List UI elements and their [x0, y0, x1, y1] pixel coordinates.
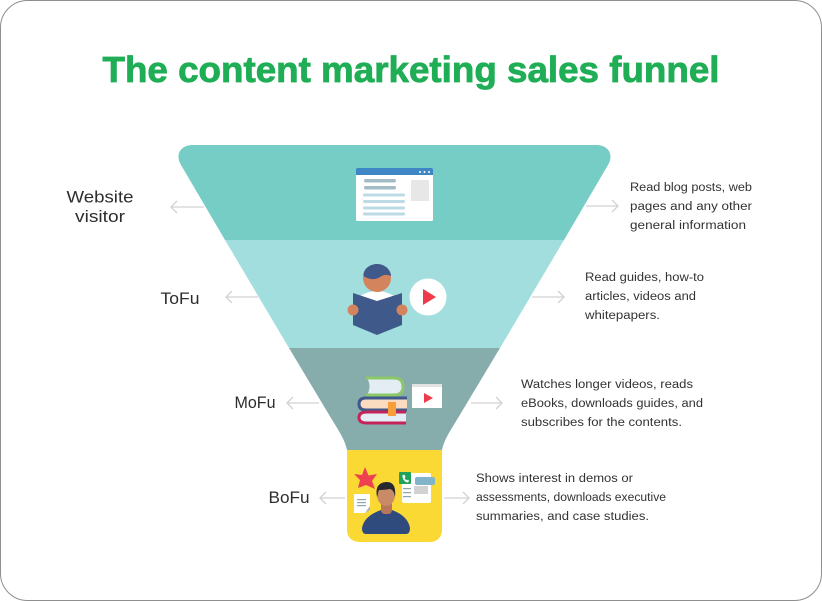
hands	[348, 304, 408, 316]
label: Website visitor	[66, 188, 134, 226]
text: MoFu description: Watches longer videos, reads	[521, 379, 693, 391]
arrow: longer videos	[471, 397, 502, 409]
arrow: ToFu	[226, 291, 258, 303]
text: BoFu description: assessments, downloads executive	[476, 492, 666, 504]
icon: document	[354, 494, 370, 513]
funnel tier: MoFu	[289, 348, 500, 450]
text: website visitor description: general information	[630, 220, 746, 232]
text: MoFu description: subscribes for the contents.	[521, 417, 682, 429]
icon: person reading book	[348, 264, 408, 335]
text: ToFu description: Read guides, how-to	[585, 272, 704, 284]
icon: stack of books	[359, 378, 407, 423]
label: BoFu: BoFu	[268, 489, 310, 507]
arrows: right	[444, 200, 618, 504]
icon: businessman	[362, 482, 410, 534]
text: website visitor description: Read blog posts, web	[630, 182, 752, 194]
text: MoFu description	[521, 379, 703, 429]
icon: video play button	[410, 278, 446, 316]
text: BoFu description: summaries, and case studies.	[476, 511, 649, 523]
arrow: MoFu	[287, 397, 319, 409]
text: ToFu description: whitepapers.	[584, 310, 660, 322]
text: MoFu description: eBooks, downloads guides, and	[521, 398, 703, 410]
label: ToFu: ToFu	[160, 290, 200, 308]
arrow: demos	[444, 492, 469, 504]
icon: web page	[356, 168, 433, 221]
text: ToFu description: articles, videos and	[585, 291, 696, 303]
icon: contact card	[399, 472, 435, 503]
arrow: website visitor	[171, 201, 204, 213]
funnel tier: BoFu	[347, 450, 442, 542]
funnel tier: ToFu	[225, 240, 564, 348]
label: Website visitor: Website	[66, 188, 134, 206]
text: BoFu description: Shows interest in demos or	[476, 473, 633, 485]
arrow: BoFu	[320, 492, 345, 504]
arrow: blog posts	[586, 200, 618, 212]
text: website visitor description: pages and any other	[630, 201, 752, 213]
label: Website visitor: visitor	[75, 208, 126, 226]
text: BoFu description	[476, 473, 666, 523]
arrows: left	[171, 201, 345, 504]
icon: video window	[412, 384, 442, 408]
funnel	[178, 145, 611, 542]
label: MoFu: MoFu	[234, 394, 276, 412]
icon: star	[354, 467, 377, 489]
title: The content marketing sales funnel	[102, 49, 719, 90]
text: ToFu description	[584, 272, 704, 322]
funnel tier: website visitor	[178, 145, 611, 240]
text: website visitor description	[630, 182, 752, 232]
arrow: guides	[532, 291, 564, 303]
